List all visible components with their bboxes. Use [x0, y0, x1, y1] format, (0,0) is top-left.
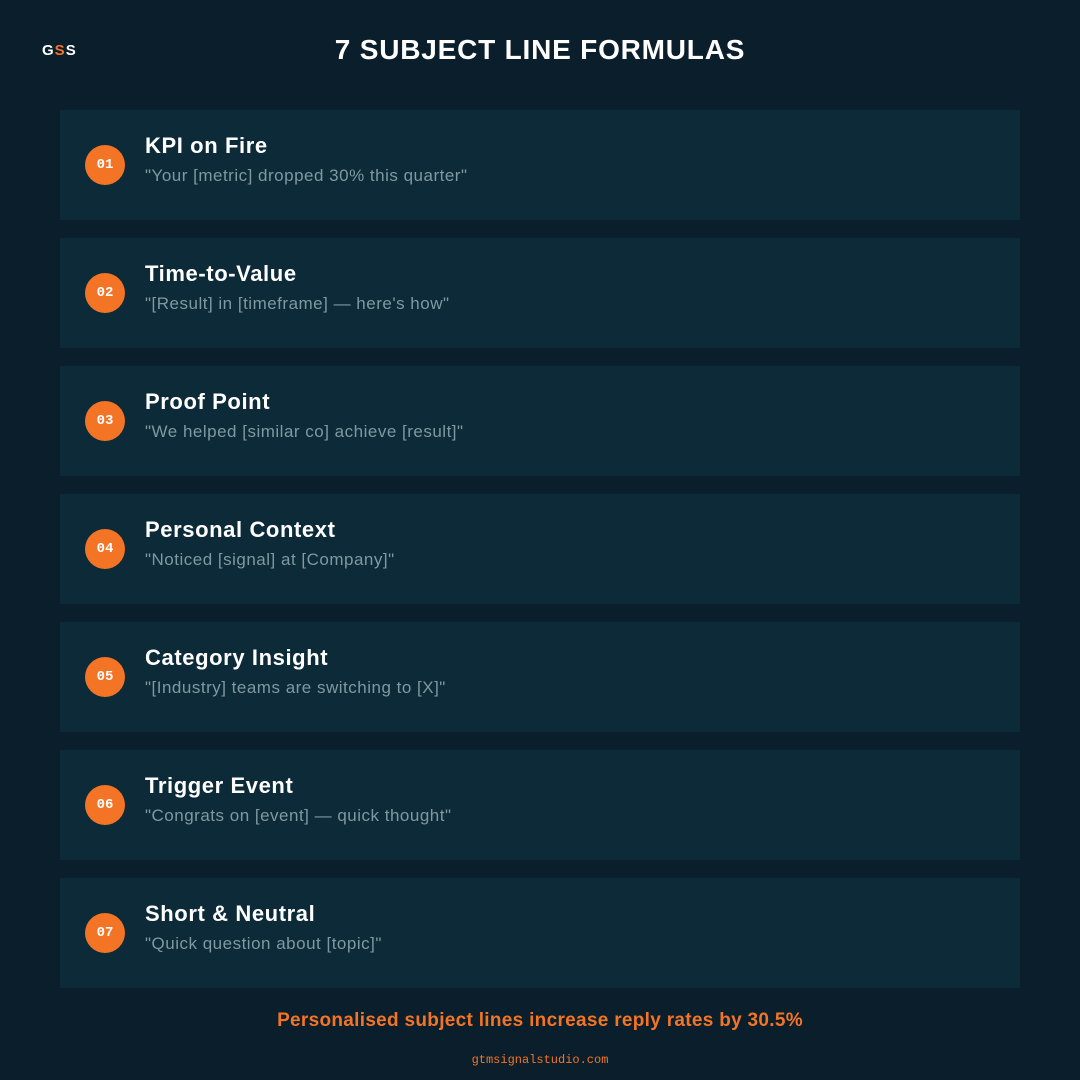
- panel: formula 06: Trigger Event: [145, 773, 293, 798]
- panel: formula 03: [60, 366, 1020, 476]
- panel: formula 02: 02: [97, 285, 113, 301]
- panel: formula 04: "Noticed [signal] at [Company]": [145, 550, 395, 569]
- panel: formula 01: [60, 110, 1020, 220]
- panel: formula 06: 06: [97, 797, 113, 813]
- panel: formula 06: "Congrats on [event] — quick thought": [145, 806, 452, 825]
- panel: formula 06: [60, 750, 1020, 860]
- panel: formula 02: [60, 238, 1020, 348]
- panel: formula 03: "We helped [similar co] achieve [result]": [145, 422, 464, 441]
- panel: formula 04: [60, 494, 1020, 604]
- panel: formula 07: "Quick question about [topic]": [145, 934, 382, 953]
- stat callout: Personalised subject lines increase reply rates by 30.5%: [277, 1010, 803, 1031]
- panel: formula 05: "[Industry] teams are switching to [X]": [145, 678, 446, 697]
- panel: formula 07: Short & Neutral: [145, 901, 315, 926]
- logo: GSS: [42, 42, 77, 59]
- panel: formula 05: Category Insight: [145, 645, 328, 670]
- panel: formula 01: 01: [97, 157, 113, 173]
- title: 7 SUBJECT LINE FORMULAS: [335, 34, 745, 65]
- panel: formula 03: Proof Point: [145, 389, 270, 414]
- panel: formula 07: 07: [97, 925, 113, 941]
- panel: formula 04: 04: [97, 541, 113, 557]
- panel: formula 03: 03: [97, 413, 113, 429]
- panel: formula 02: "[Result] in [timeframe] — here's how": [145, 294, 450, 313]
- footer url: gtmsignalstudio.com: [472, 1053, 608, 1067]
- panel: formula 05: 05: [97, 669, 113, 685]
- panel: formula 01: KPI on Fire: [145, 133, 268, 158]
- panel: formula 07: [60, 878, 1020, 988]
- panel: formula 05: [60, 622, 1020, 732]
- panel: formula 02: Time-to-Value: [145, 261, 297, 286]
- panel: formula 04: Personal Context: [145, 517, 336, 542]
- panel: formula 01: "Your [metric] dropped 30% this quarter": [145, 166, 468, 185]
